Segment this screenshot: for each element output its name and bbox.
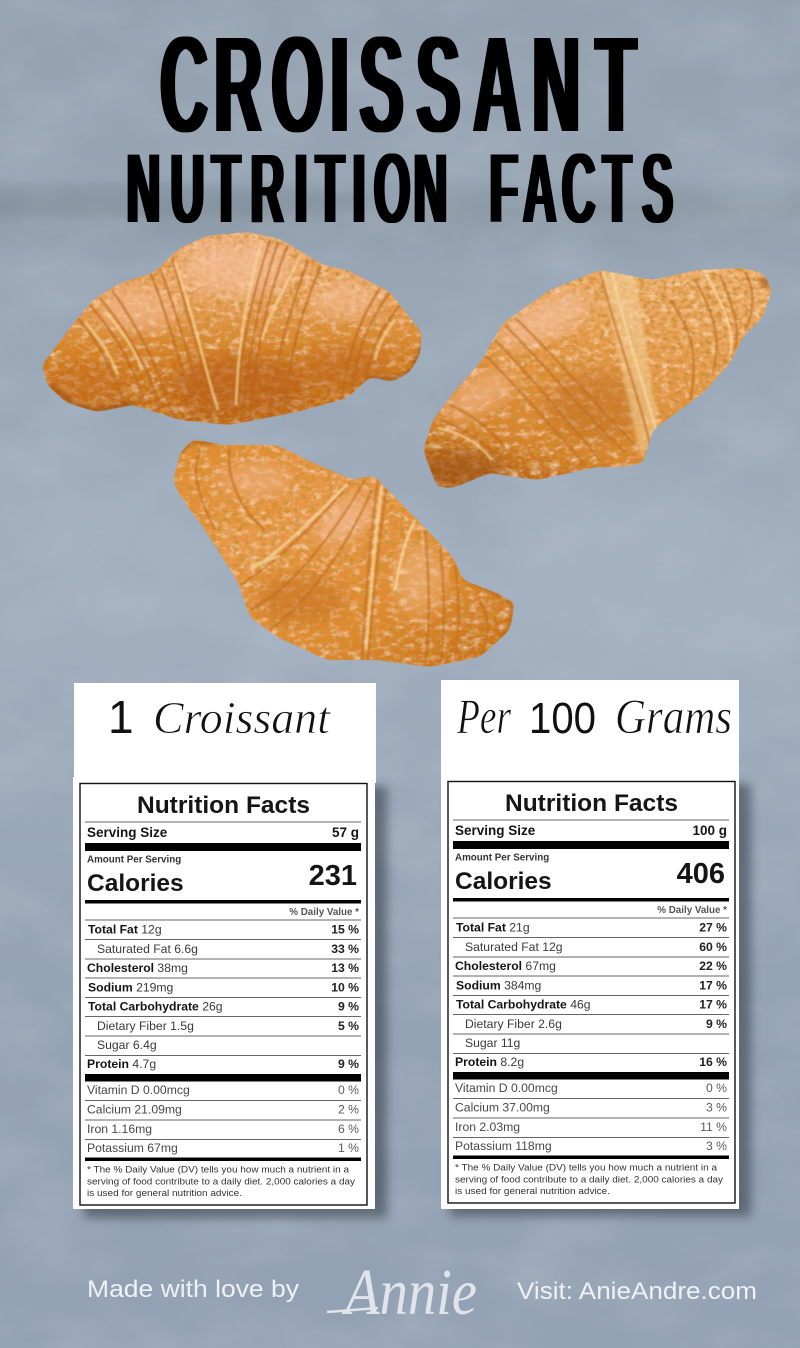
nutrient rows <box>87 922 359 1071</box>
vitamins and minerals: 0 % <box>706 1081 727 1095</box>
nutrient rows: Protein 4.7g <box>87 1057 156 1071</box>
header card: Per 100 Grams: Grams <box>615 688 732 744</box>
vitamins and minerals: Iron 1.16mg <box>87 1122 152 1136</box>
vitamins and minerals: 11 % <box>700 1120 727 1134</box>
calories: 406 <box>677 858 725 890</box>
nutrient rows: 17 % <box>699 978 727 992</box>
calories: Amount Per Serving <box>455 852 549 864</box>
nutrient rows: Saturated Fat 6.6g <box>97 942 198 956</box>
header card: Per 100 Grams <box>441 680 739 780</box>
title line: NUTRITION FACTS: NUTRITION FACTS <box>127 131 673 245</box>
Annie signature: Annie <box>342 1256 477 1329</box>
calories: % Daily Value * <box>657 905 727 916</box>
footnote: is used for general nutrition advice. <box>455 1186 610 1197</box>
vitamins and minerals: 6 % <box>338 1122 359 1136</box>
vitamins and minerals: Calcium 37.00mg <box>455 1100 550 1114</box>
footer credits <box>87 1256 757 1329</box>
nutrient rows: Total Carbohydrate 26g <box>88 1000 223 1014</box>
vitamins and minerals: 3 % <box>706 1100 727 1114</box>
vitamins and minerals: Vitamin D 0.00mcg <box>87 1083 190 1097</box>
nutrient rows: 60 % <box>699 940 727 954</box>
nutrient rows: 9 % <box>706 1017 727 1031</box>
calories: Calories <box>455 868 552 895</box>
vitamins and minerals <box>455 1081 727 1153</box>
calories: Amount Per Serving <box>87 854 181 866</box>
header card: 1 Croissant: Croissant <box>153 692 331 743</box>
calories <box>87 854 359 918</box>
serving size: 100 g <box>692 823 727 838</box>
nutrient rows: Total Fat 21g <box>456 920 530 934</box>
footnote: serving of food contribute to a daily diet. 2,000 calories a day <box>455 1174 723 1186</box>
vitamins and minerals: Potassium 118mg <box>455 1139 552 1153</box>
serving size: 57 g <box>332 825 359 840</box>
nutrient rows: Sugar 6.4g <box>97 1038 157 1052</box>
vitamins and minerals <box>87 1083 359 1155</box>
nutrient rows: 27 % <box>699 920 727 934</box>
croissant photo: upper right <box>424 268 771 488</box>
card shadow <box>450 784 751 1216</box>
calories: 231 <box>309 860 357 892</box>
nutrient rows: Sodium 384mg <box>456 978 541 992</box>
nutrient rows: Sodium 219mg <box>88 980 173 994</box>
header card: 1 Croissant <box>74 683 376 783</box>
nutrient rows: 10 % <box>331 980 359 994</box>
footnote <box>87 1164 355 1199</box>
vitamins and minerals: 0 % <box>338 1083 359 1097</box>
made with love text: Made with love by <box>87 1276 299 1303</box>
serving size <box>455 823 727 838</box>
vitamins and minerals: 2 % <box>338 1102 359 1116</box>
nutrient rows: 22 % <box>699 959 727 973</box>
vitamins and minerals: Calcium 21.09mg <box>87 1102 182 1116</box>
serving size: Serving Size <box>455 823 536 838</box>
nutrient rows: Cholesterol 67mg <box>455 959 556 973</box>
nutrient rows: 9 % <box>338 1000 359 1014</box>
calories <box>455 852 727 916</box>
nutrition label card <box>441 775 739 1209</box>
nutrient rows: Dietary Fiber 2.6g <box>465 1017 562 1031</box>
nutrient rows: 17 % <box>699 998 727 1012</box>
footnote <box>455 1162 723 1197</box>
footnote: * The % Daily Value (DV) tells you how much a nutrient in a <box>455 1162 718 1174</box>
panel: 1 croissant nutrition label <box>73 683 387 1218</box>
title <box>126 6 673 245</box>
nutrient rows: Total Fat 12g <box>88 922 162 936</box>
header card: Per 100 Grams: Per <box>456 688 511 744</box>
vitamins and minerals: Vitamin D 0.00mcg <box>455 1081 558 1095</box>
croissant photo: bottom centre <box>174 440 514 667</box>
nutrient rows: Saturated Fat 12g <box>465 940 563 954</box>
vitamins and minerals: Potassium 67mg <box>87 1141 178 1155</box>
nutrition label card <box>73 777 375 1209</box>
calories: Calories <box>87 870 184 897</box>
nutrient rows: Cholesterol 38mg <box>87 961 188 975</box>
title line: CROISSANT: CROISSANT <box>160 6 636 164</box>
nutrient rows: 5 % <box>338 1019 359 1033</box>
footnote: * The % Daily Value (DV) tells you how much a nutrient in a <box>87 1164 350 1176</box>
croissant photo: upper left <box>43 232 422 425</box>
nutrient rows: Sugar 11g <box>465 1036 520 1050</box>
website text: Visit: AnieAndre.com <box>517 1278 757 1305</box>
nutrient rows: Dietary Fiber 1.5g <box>97 1019 194 1033</box>
nutrient rows: Protein 8.2g <box>455 1055 524 1069</box>
label heading: Nutrition Facts <box>137 792 310 819</box>
nutrient rows: Total Carbohydrate 46g <box>456 998 591 1012</box>
nutrient rows: 33 % <box>331 942 359 956</box>
vitamins and minerals: 1 % <box>338 1141 359 1155</box>
nutrient rows <box>455 920 727 1069</box>
panel: per 100 grams nutrition label <box>441 680 751 1216</box>
footnote: is used for general nutrition advice. <box>87 1188 242 1199</box>
calories: % Daily Value * <box>289 907 359 918</box>
nutrient rows: 13 % <box>331 961 359 975</box>
label heading: Nutrition Facts <box>505 790 678 817</box>
header card: Per 100 Grams: 100 <box>529 694 596 743</box>
footnote: serving of food contribute to a daily diet. 2,000 calories a day <box>87 1176 355 1188</box>
header card: 1 Croissant: 1 <box>108 691 134 743</box>
vitamins and minerals: Iron 2.03mg <box>455 1120 520 1134</box>
serving size <box>87 825 359 840</box>
vitamins and minerals: 3 % <box>706 1139 727 1153</box>
serving size: Serving Size <box>87 825 168 840</box>
card shadow <box>84 786 387 1218</box>
nutrient rows: 15 % <box>331 922 359 936</box>
nutrient rows: 16 % <box>699 1055 727 1069</box>
nutrient rows: 9 % <box>338 1057 359 1071</box>
